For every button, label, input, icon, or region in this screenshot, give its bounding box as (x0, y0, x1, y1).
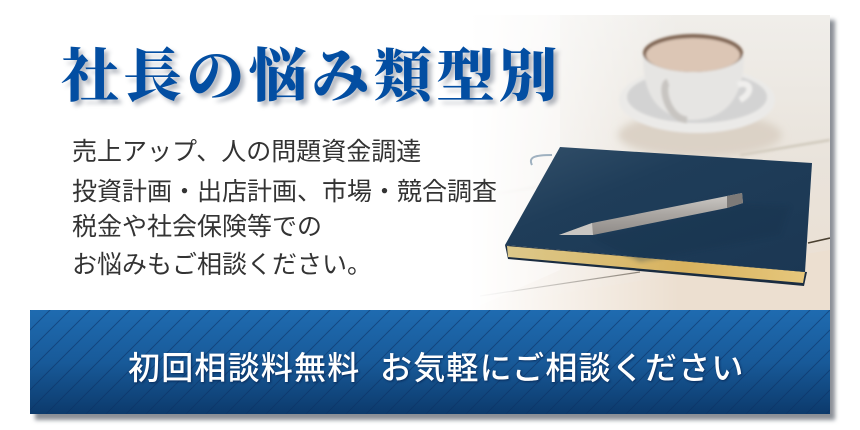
panel: blue banner (30, 310, 830, 414)
icon: coffee cup and saucer (618, 34, 782, 157)
text block: description: 売上アップ、人の問題資金調達 (72, 138, 421, 166)
text block: description: お悩みもご相談ください。 (72, 251, 372, 279)
text block: description: 税金や社会保険等での (72, 213, 322, 241)
banner text: 初回相談料無料 (128, 350, 360, 386)
text block: description (72, 138, 497, 279)
icon: notebook with gold page edge (505, 147, 812, 286)
banner text: お気軽にご相談ください (380, 350, 745, 386)
banner text (128, 350, 745, 386)
photo: table, cup and notebook (486, 15, 830, 310)
title: 社長の悩み類型別 (61, 44, 562, 109)
icon: pen (559, 193, 743, 235)
text block: description: 投資計画・出店計画、市場・競合調査 (72, 178, 497, 206)
